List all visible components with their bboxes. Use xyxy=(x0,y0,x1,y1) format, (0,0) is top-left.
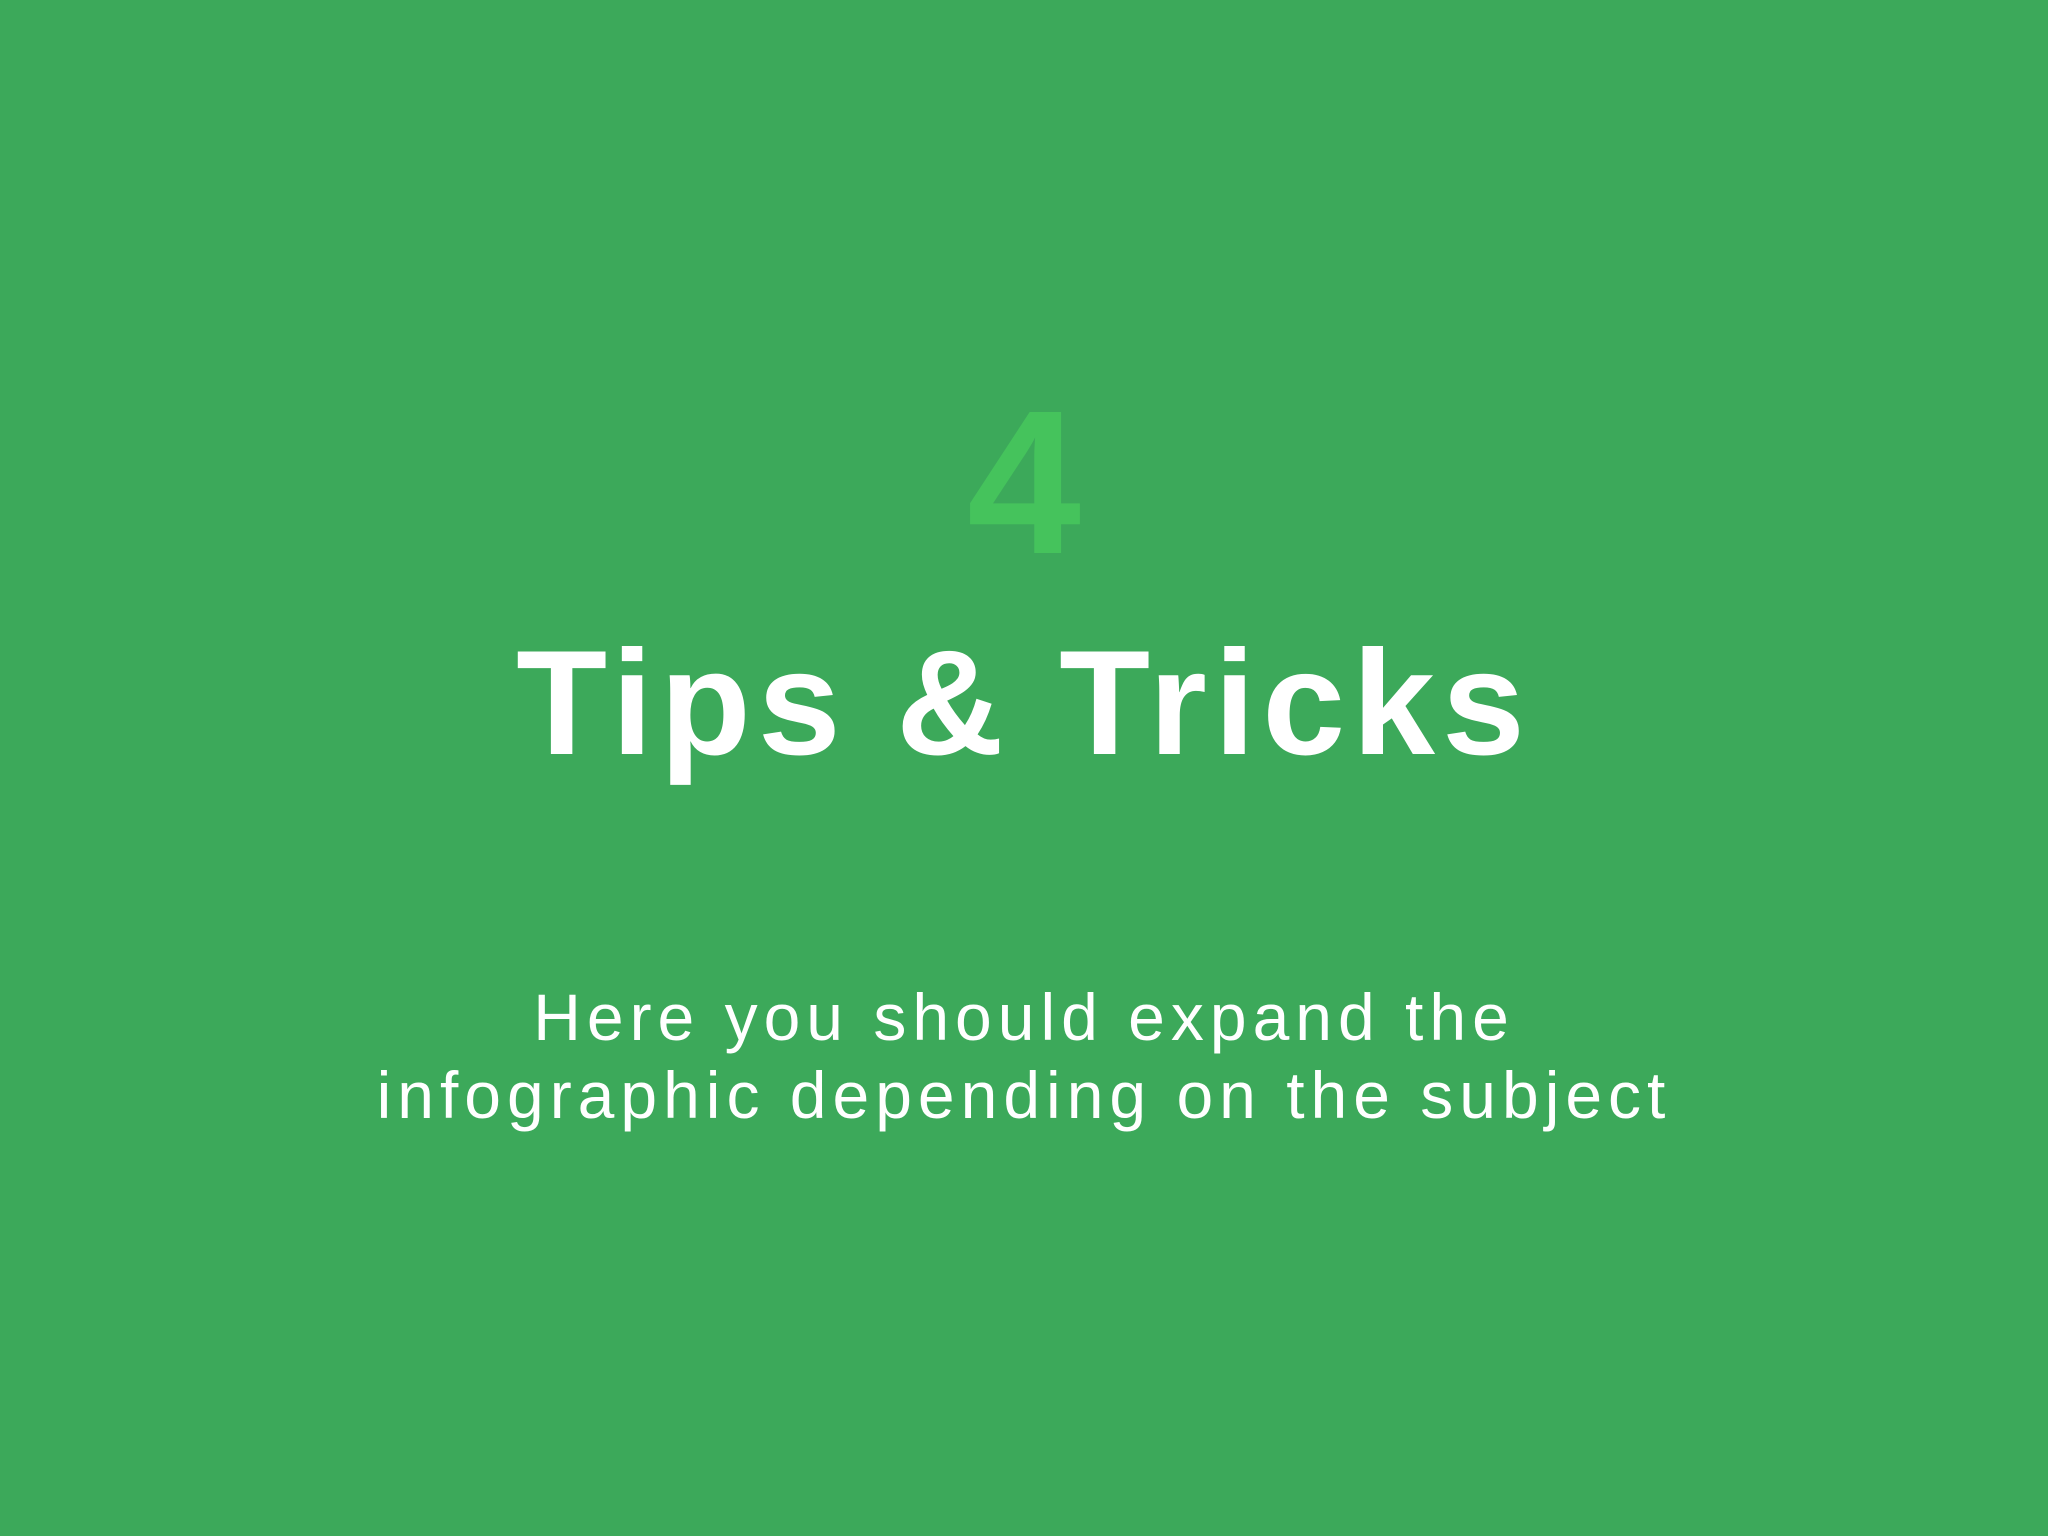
subtitle text block xyxy=(377,980,1671,1132)
subtitle text block: Here you should expand the xyxy=(533,980,1515,1054)
subtitle text block: infographic depending on the subject xyxy=(377,1058,1671,1132)
title: Tips & Tricks xyxy=(516,619,1532,786)
number: 4: 4 xyxy=(967,368,1081,597)
